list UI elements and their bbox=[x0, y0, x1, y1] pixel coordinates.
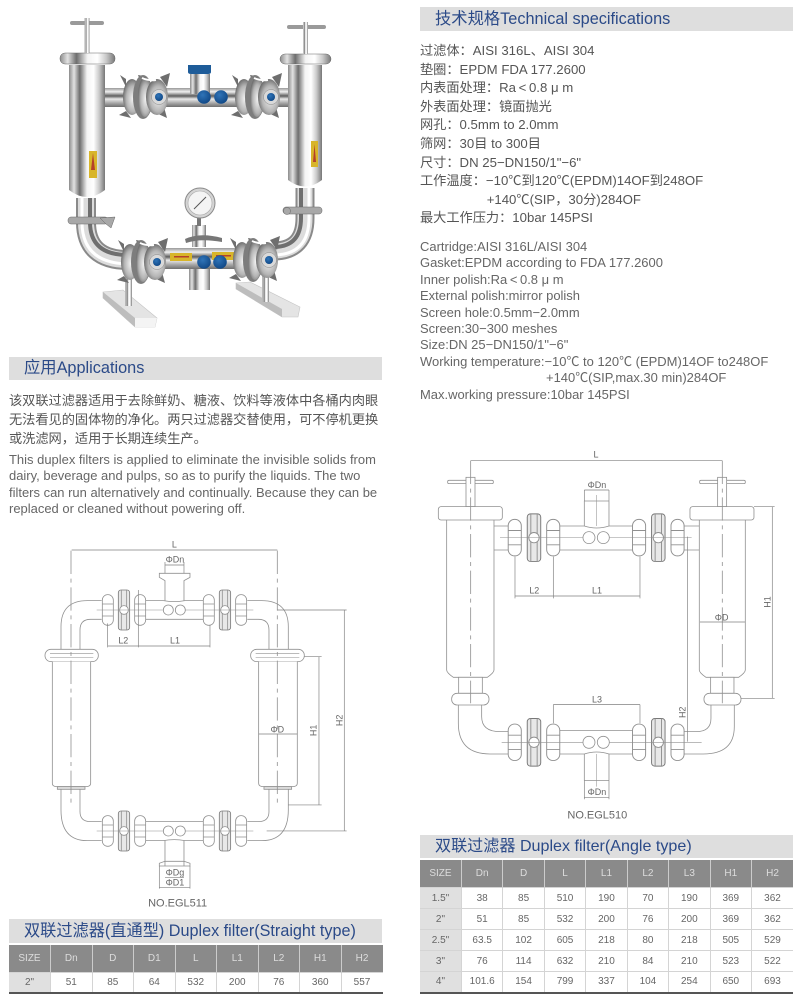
table: straight type dimensions: 2" bbox=[25, 977, 34, 988]
table: angle type dimensions: 101.6 bbox=[470, 976, 495, 987]
table: angle type dimensions: SIZE bbox=[429, 868, 452, 879]
table: angle type dimensions: L3 bbox=[684, 868, 695, 879]
table: angle type dimensions: 650 bbox=[722, 976, 739, 987]
right elbow bbox=[275, 188, 309, 255]
pressure gauge bbox=[185, 188, 222, 247]
table: angle type dimensions: 200 bbox=[598, 914, 615, 924]
heading: straight type table bbox=[9, 919, 382, 943]
table: angle type dimensions: 85 bbox=[518, 892, 529, 904]
dimension labels: ΦDn bbox=[588, 787, 606, 797]
table: angle type dimensions: 102 bbox=[515, 934, 532, 946]
text block: Chinese specifications: 网孔：0.5mm to 2.0mm bbox=[420, 117, 558, 132]
dimension labels: ΦD bbox=[715, 613, 729, 623]
table: angle type dimensions: 2.5" bbox=[432, 934, 449, 946]
diagram: straight type EGL511 bbox=[45, 540, 347, 909]
top blue valves bbox=[197, 90, 228, 104]
table: angle type dimensions: 693 bbox=[764, 976, 781, 987]
table: angle type dimensions: L bbox=[562, 868, 568, 879]
bottom manifold bbox=[125, 248, 265, 290]
table: straight type dimensions: SIZE bbox=[18, 953, 41, 964]
text block: English applications: replaced or cleaned without powering off. bbox=[9, 501, 245, 516]
right filter housing bbox=[280, 22, 331, 186]
table: angle type dimensions: 218 bbox=[681, 934, 698, 946]
pipework bbox=[458, 501, 734, 781]
diagram: angle type EGL510 bbox=[438, 450, 775, 822]
dimension labels bbox=[118, 540, 344, 888]
valves and centre lines bbox=[471, 461, 722, 787]
heading: applications bbox=[9, 357, 382, 380]
dimension labels: L bbox=[593, 450, 598, 460]
text block: Chinese specifications: 尺寸：DN 25−DN150/1"−6" bbox=[420, 155, 581, 170]
table: straight type dimensions: D1 bbox=[148, 953, 161, 964]
table: angle type dimensions: D bbox=[520, 868, 527, 879]
table: straight type dimensions: L1 bbox=[232, 953, 243, 964]
table: angle type dimensions: 51 bbox=[477, 914, 488, 924]
table: angle type dimensions: 190 bbox=[598, 892, 615, 904]
dimension labels: L bbox=[172, 540, 177, 550]
table: angle type dimensions: 76 bbox=[642, 914, 653, 924]
table: angle type dimensions: 210 bbox=[598, 956, 615, 966]
heading: angle type table bbox=[420, 835, 793, 858]
table: angle type dimensions: 84 bbox=[642, 956, 653, 966]
table: angle type dimensions: 210 bbox=[681, 956, 698, 966]
table: angle type dimensions: 369 bbox=[722, 914, 739, 924]
text block: Chinese specifications bbox=[420, 43, 703, 225]
table: angle type dimensions: H2 bbox=[766, 868, 779, 879]
dimension labels: ΦDg bbox=[166, 867, 184, 877]
table: straight type dimensions: 200 bbox=[229, 977, 246, 988]
dimension labels: L2 bbox=[118, 636, 128, 646]
text block: English specifications bbox=[420, 239, 768, 402]
heading: technical specifications: 技术规格Technical specifications bbox=[435, 10, 670, 28]
table: straight type dimensions: 85 bbox=[107, 977, 118, 988]
bottom blue valves bbox=[197, 255, 227, 269]
heading: straight type table: 双联过滤器(直通型) Duplex filter(Straight type) bbox=[24, 922, 356, 940]
table: angle type dimensions: 799 bbox=[557, 976, 573, 987]
top manifold pipe bbox=[105, 65, 295, 107]
table: straight type dimensions: 64 bbox=[149, 977, 160, 988]
heading: angle type table: 双联过滤器 Duplex filter(Angle type) bbox=[435, 837, 692, 855]
table: straight type dimensions: 557 bbox=[354, 977, 370, 988]
text block: Chinese specifications: 垫圈：EPDM FDA 177.2600 bbox=[420, 62, 586, 77]
text block: Chinese applications bbox=[9, 393, 378, 446]
table: angle type dimensions: 523 bbox=[722, 956, 739, 966]
text block: Chinese specifications: 最大工作压力：10bar 145PSI bbox=[420, 210, 593, 225]
pipework bbox=[61, 573, 288, 866]
table: angle type dimensions: Dn bbox=[476, 868, 489, 879]
filter housings bbox=[45, 649, 304, 789]
dimension labels: H1 bbox=[762, 596, 772, 608]
table: angle type dimensions: H1 bbox=[724, 868, 737, 879]
dimension labels: L1 bbox=[592, 586, 602, 596]
table: straight type dimensions bbox=[9, 945, 382, 994]
dimension labels: L1 bbox=[170, 636, 180, 646]
dimension labels: ΦD bbox=[270, 724, 285, 734]
text block: English specifications: External polish:mirror polish bbox=[420, 288, 580, 303]
table: straight type dimensions: 532 bbox=[187, 977, 204, 988]
text block: Chinese specifications: 外表面处理：镜面抛光 bbox=[420, 99, 552, 114]
table: angle type dimensions: 80 bbox=[642, 934, 653, 946]
table: angle type dimensions: 1.5" bbox=[432, 892, 449, 904]
table: angle type dimensions: 3" bbox=[436, 956, 445, 966]
table: angle type dimensions: 2" bbox=[436, 914, 445, 924]
table: angle type dimensions: 104 bbox=[640, 976, 656, 987]
table: angle type dimensions: 76 bbox=[477, 956, 488, 966]
table: angle type dimensions: 190 bbox=[681, 892, 698, 904]
dimension lines bbox=[471, 461, 775, 799]
valves and centre lines bbox=[71, 551, 277, 836]
text block: English specifications: Cartridge:AISI 316L/AISI 304 bbox=[420, 239, 587, 254]
table: angle type dimensions: L1 bbox=[601, 868, 612, 879]
table: angle type dimensions: 218 bbox=[598, 934, 615, 946]
heading: applications: 应用Applications bbox=[24, 359, 144, 377]
dimension labels: H2 bbox=[677, 707, 687, 718]
table: straight type dimensions: 51 bbox=[66, 977, 77, 988]
table: angle type dimensions: 337 bbox=[598, 976, 615, 987]
table: angle type dimensions: 510 bbox=[557, 892, 573, 904]
table: straight type dimensions: L bbox=[193, 953, 199, 964]
table: straight type dimensions: Dn bbox=[65, 953, 78, 964]
table: angle type dimensions: L2 bbox=[642, 868, 653, 879]
dimension labels bbox=[529, 450, 772, 797]
table: angle type dimensions: 532 bbox=[557, 914, 573, 924]
dimension labels: ΦDn bbox=[588, 480, 606, 490]
model number: NO.EGL511 bbox=[148, 897, 207, 909]
pipe joints bbox=[102, 590, 247, 851]
left elbow bbox=[82, 198, 128, 264]
table: straight type dimensions: 360 bbox=[312, 977, 329, 988]
text block: English specifications: Max.working pressure:10bar 145PSI bbox=[420, 387, 630, 402]
dimension labels: ΦD1 bbox=[166, 878, 184, 888]
text block: English specifications: Screen hole:0.5mm−2.0mm bbox=[420, 305, 580, 320]
table: angle type dimensions: 114 bbox=[516, 956, 532, 966]
table: angle type dimensions: 362 bbox=[764, 914, 781, 924]
top clamps bbox=[119, 73, 282, 119]
text block: Chinese applications: 或洗滤网，适用于长期连续生产。 bbox=[9, 431, 207, 446]
text block: English specifications: Inner polish:Ra < 0.8 μ m bbox=[420, 272, 564, 287]
table: angle type dimensions: 154 bbox=[515, 976, 532, 987]
heading: technical specifications bbox=[420, 7, 793, 31]
table: angle type dimensions: 605 bbox=[557, 934, 573, 946]
text block: Chinese specifications: 工作温度：−10℃到120℃(EPDM)14OF到248OF bbox=[420, 173, 703, 188]
table: angle type dimensions: 70 bbox=[642, 892, 653, 904]
dimension labels: L3 bbox=[592, 694, 602, 704]
table: straight type dimensions: H1 bbox=[314, 953, 327, 964]
feet bbox=[103, 270, 300, 327]
text block: English specifications: Working temperature:−10℃ to 120℃ (EPDM)14OF to248OF bbox=[420, 354, 768, 369]
table: straight type dimensions: 76 bbox=[273, 977, 284, 988]
text block: Chinese specifications: 过滤体：AISI 316L、AISI 304 bbox=[420, 43, 594, 58]
text block: English specifications: Screen:30−300 meshes bbox=[420, 321, 557, 336]
text block: Chinese specifications: 筛网：30目 to 300目 bbox=[420, 136, 541, 151]
table: angle type dimensions: 4" bbox=[436, 976, 445, 987]
dimension labels: ΦDn bbox=[166, 554, 184, 564]
table: angle type dimensions: 254 bbox=[681, 976, 698, 987]
table: angle type dimensions: 369 bbox=[722, 892, 739, 904]
text block: English applications: This duplex filters is applied to eliminate the invisible solids from bbox=[9, 452, 376, 467]
table: angle type dimensions: 38 bbox=[477, 892, 488, 904]
bottom clamps bbox=[117, 236, 280, 284]
text block: English applications: dairy, beverage and pulps, so as to purify the liquids. The two bbox=[9, 468, 360, 483]
text block: English applications: filters can run alternatively and continually. Because they can be bbox=[9, 485, 377, 500]
product photo: duplex filter bbox=[60, 18, 331, 327]
dimension labels: H1 bbox=[309, 725, 319, 736]
table: angle type dimensions: 522 bbox=[764, 956, 781, 966]
table: straight type dimensions: D bbox=[109, 953, 116, 964]
dimension labels: H2 bbox=[334, 715, 344, 726]
filter housings bbox=[438, 477, 754, 705]
text block: English specifications: Size:DN 25−DN150/1"−6" bbox=[420, 337, 568, 352]
table: angle type dimensions: 200 bbox=[681, 914, 698, 924]
text block: Chinese specifications: +140℃(SIP，30分)284OF bbox=[487, 192, 641, 207]
pipe joints bbox=[508, 514, 684, 766]
text block: English specifications: +140℃(SIP,max.30 min)284OF bbox=[546, 370, 726, 385]
table: straight type dimensions: L2 bbox=[273, 953, 284, 964]
table: angle type dimensions: 63.5 bbox=[472, 934, 492, 946]
text block: Chinese specifications: 内表面处理：Ra < 0.8 μ m bbox=[420, 80, 573, 95]
table: angle type dimensions bbox=[420, 860, 793, 994]
text block: Chinese applications: 无法看见的固体物的净化。两只过滤器交替使用，可不停机更换 bbox=[9, 412, 378, 427]
model number: NO.EGL510 bbox=[567, 810, 627, 822]
dimension labels: L2 bbox=[529, 586, 539, 596]
text block: English applications bbox=[9, 452, 377, 516]
small elbow clamps bbox=[68, 207, 322, 228]
text block: Chinese applications: 该双联过滤器适用于去除鲜奶、糖液、饮料等液体中各桶内肉眼 bbox=[9, 393, 378, 408]
table: straight type dimensions: H2 bbox=[356, 953, 368, 964]
table: angle type dimensions: 505 bbox=[722, 934, 739, 946]
table: angle type dimensions: 362 bbox=[764, 892, 781, 904]
table: angle type dimensions: 632 bbox=[557, 956, 573, 966]
left filter housing bbox=[60, 18, 115, 197]
table: angle type dimensions: 85 bbox=[518, 914, 529, 924]
table: angle type dimensions: 529 bbox=[764, 934, 781, 946]
dimension lines bbox=[72, 550, 347, 889]
text block: English specifications: Gasket:EPDM according to FDA 177.2600 bbox=[420, 255, 663, 270]
